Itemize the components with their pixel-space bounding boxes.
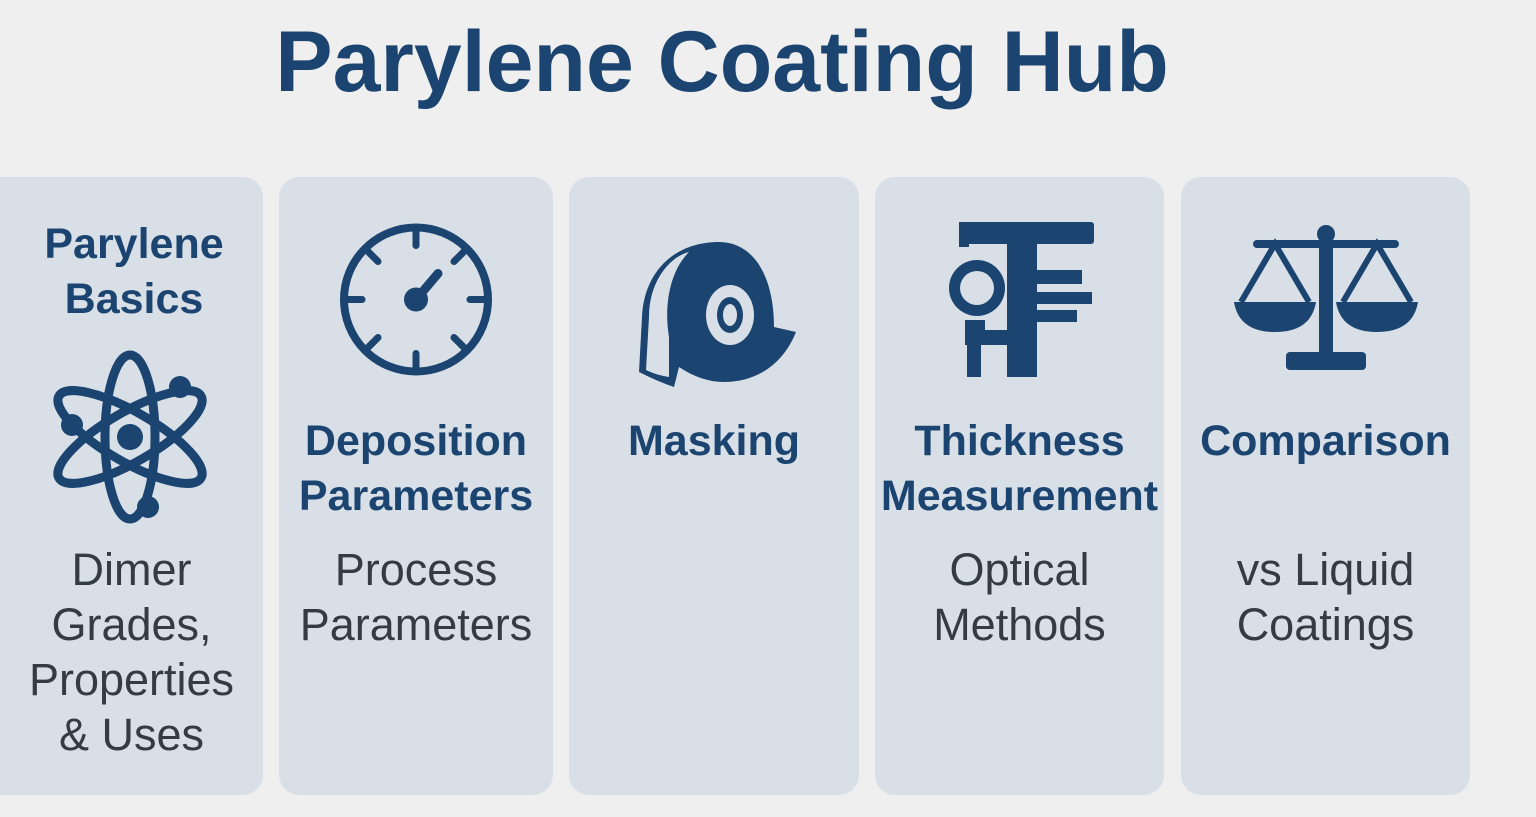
text: process parameters xyxy=(300,544,532,650)
text: vs liquid coatings: Coatings xyxy=(1237,599,1414,650)
panel: deposition parameters xyxy=(279,177,553,795)
heading: deposition parameters xyxy=(299,417,533,520)
icon: tape roll xyxy=(639,242,796,387)
text: dimer grades xyxy=(29,544,234,760)
text: vs liquid coatings: vs Liquid xyxy=(1237,544,1414,595)
text: optical methods: Methods xyxy=(933,599,1106,650)
icon: balance scale xyxy=(1234,225,1418,370)
heading: parylene basics: Parylene xyxy=(44,220,224,268)
heading: comparison: Comparison xyxy=(1200,417,1451,465)
panel: parylene basics xyxy=(0,177,263,795)
text: optical methods: Optical xyxy=(949,544,1090,595)
text: dimer grades: Grades, xyxy=(51,599,212,650)
icon: gauge xyxy=(340,224,492,376)
heading: deposition parameters: Deposition xyxy=(305,417,527,465)
icon: caliper xyxy=(949,222,1094,377)
text: optical methods xyxy=(933,544,1106,650)
icon: atom xyxy=(53,350,207,524)
heading: thickness measurement: Measurement xyxy=(881,472,1158,520)
text: vs liquid coatings xyxy=(1236,544,1414,650)
heading: thickness measurement xyxy=(881,417,1158,520)
heading: parylene basics: Basics xyxy=(65,275,203,323)
heading: deposition parameters: Parameters xyxy=(299,472,533,520)
panel: masking xyxy=(569,177,859,795)
text: dimer grades: Dimer xyxy=(72,544,192,595)
heading: thickness measurement: Thickness xyxy=(914,417,1125,465)
panel: comparison xyxy=(1181,177,1470,795)
panel: thickness measurement xyxy=(875,177,1164,795)
text: dimer grades: Properties xyxy=(29,654,234,705)
title: Parylene Coating Hub xyxy=(275,14,1169,110)
heading: masking: Masking xyxy=(628,417,800,465)
heading: parylene basics xyxy=(44,220,224,323)
text: dimer grades: & Uses xyxy=(59,709,204,760)
text: process parameters: Parameters xyxy=(300,599,532,650)
text: process parameters: Process xyxy=(335,544,497,595)
